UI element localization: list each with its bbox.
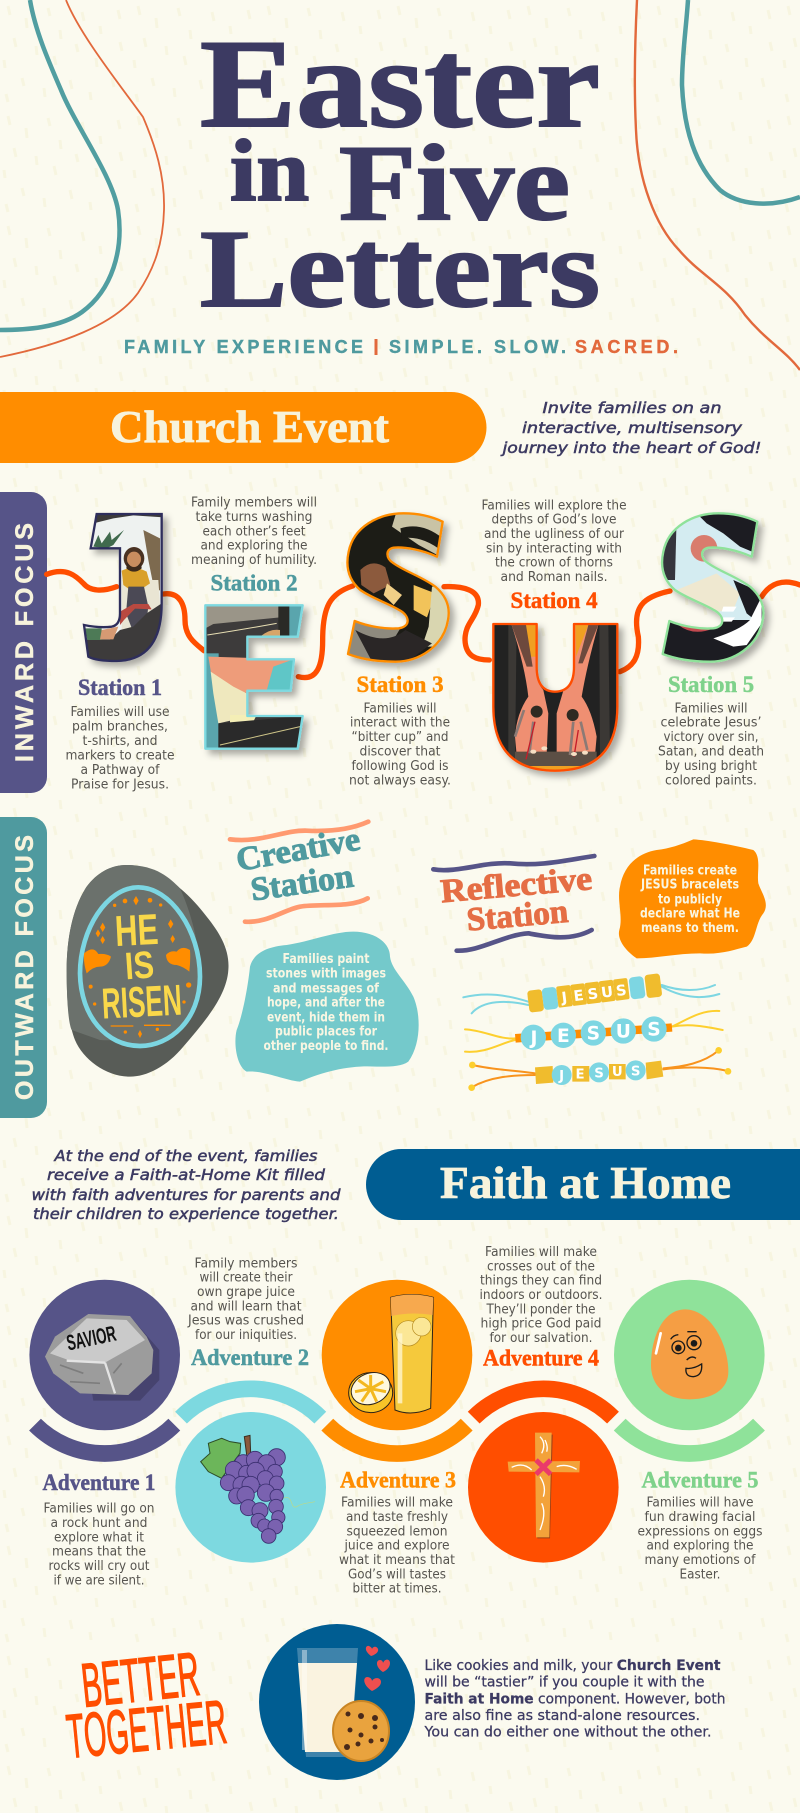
JESUS letters and connectors — [47, 510, 800, 773]
icon: painted stone, he is risen: IS — [123, 943, 155, 988]
icon: jesus bracelets: S — [615, 982, 628, 1000]
icon: jesus bracelets: S — [631, 1064, 640, 1079]
station 3: Station 3 — [356, 672, 444, 697]
station 2: Family members will — [191, 496, 317, 511]
text: better together description: are also fine as stand-alone resources. — [424, 1708, 700, 1724]
adventure 3: juice and explore — [344, 1539, 450, 1554]
station 5: by using bright — [665, 759, 757, 774]
icon: jesus bracelets: E — [573, 987, 585, 1005]
adventure 1: explore what it — [54, 1530, 144, 1545]
banner: Church Event — [0, 392, 486, 463]
station 2: Station 2 — [210, 571, 298, 596]
station 1: Families will use — [70, 705, 170, 720]
text: faith at home intro: their children to experience together. — [33, 1205, 339, 1223]
callout: creative station description: stones with images — [266, 967, 386, 982]
station 3: discover that — [360, 744, 440, 759]
station 3: “bitter cup” and — [352, 730, 448, 745]
icon: jesus bracelets: J — [560, 989, 568, 1007]
intro text: journey into the heart of God! — [500, 439, 762, 457]
icon: jesus bracelets: U — [600, 983, 614, 1002]
callout: reflective station description: Families create — [643, 863, 737, 878]
title: Five — [339, 124, 570, 243]
adventure 2: Adventure 2 — [191, 1345, 309, 1370]
icon: jesus bracelets: S — [587, 1024, 600, 1045]
text: better together description: Like cookies and milk, your Church Event — [424, 1658, 721, 1674]
adventure 3: bitter at times. — [352, 1582, 442, 1597]
adventure 4: for our salvation. — [490, 1331, 592, 1346]
station 1: Station 1 — [78, 675, 162, 700]
callout: creative station description: and messages of — [273, 981, 379, 996]
station 5 — [658, 672, 764, 788]
icon: jesus bracelets: J — [558, 1069, 564, 1084]
station 3: interact with the — [350, 716, 450, 731]
station 1: palm branches, — [72, 720, 168, 735]
icon: lemon juice glass — [346, 1294, 433, 1413]
adventure 5: Families will have — [646, 1496, 754, 1511]
callout: creative station description — [235, 932, 419, 1082]
adventure 5: and exploring the — [646, 1539, 754, 1554]
heading: reflective station: Station — [465, 893, 570, 939]
decorative curves: top corners — [0, 0, 800, 370]
intro text — [500, 399, 762, 457]
station 2: meaning of humility. — [191, 553, 317, 568]
station 5: Station 5 — [668, 672, 754, 697]
station 4: sin by interacting with — [486, 541, 622, 556]
station 3: Families will — [364, 701, 436, 716]
station 2 — [191, 496, 317, 596]
adventure 2 — [187, 1256, 309, 1370]
adventure 3: Adventure 3 — [340, 1468, 456, 1493]
letter S, station 3 — [342, 510, 452, 663]
icon: jesus bracelets: E — [557, 1026, 570, 1047]
adventure 3: squeezed lemon — [346, 1524, 448, 1539]
heading: reflective station: Reflective — [439, 860, 593, 910]
heading: better together — [64, 1640, 230, 1772]
station 5: Families will — [674, 701, 748, 716]
callout: creative station description: hope, and after the — [267, 996, 385, 1011]
heading: creative station — [230, 821, 368, 922]
text: better together description: will be “tastier” if you couple it with the — [424, 1675, 704, 1691]
subtitle: FAMILY EXPERIENCE — [124, 337, 363, 357]
title: Letters — [200, 208, 600, 331]
adventure 2: for our iniquities. — [195, 1328, 297, 1343]
adventure 1: means that the — [52, 1545, 146, 1560]
station 4 — [482, 498, 626, 613]
callout: creative station description: event, hide them in — [267, 1010, 385, 1025]
adventure 2: will create their — [200, 1271, 293, 1286]
icon: jesus bracelets — [463, 973, 731, 1091]
intro text: interactive, multisensory — [522, 419, 743, 437]
adventure 1: rocks will cry out — [48, 1559, 150, 1574]
callout: creative station description: public places for — [275, 1025, 377, 1040]
icon: painted stone, he is risen: RISEN — [101, 977, 183, 1029]
icon: egg face — [651, 1309, 728, 1399]
station 2: each other’s feet — [202, 524, 306, 539]
adventure 2: own grape juice — [197, 1285, 295, 1300]
banner: Faith at Home: Faith at Home — [440, 1157, 731, 1208]
banner: Faith at Home — [366, 1149, 800, 1220]
icon: painted stone, he is risen — [67, 865, 229, 1077]
intro text: Invite families on an — [542, 399, 722, 417]
station 1: a Pathway of — [80, 763, 160, 778]
callout: creative station description: other people to find. — [264, 1039, 388, 1054]
station 2: take turns washing — [196, 510, 312, 525]
station 4: Families will explore the — [482, 498, 626, 513]
station 5: Satan, and death — [658, 744, 764, 759]
callout: creative station description: Families paint — [282, 952, 370, 967]
text: faith at home intro: with faith adventures for parents and — [32, 1186, 341, 1204]
icon: jesus bracelets: S — [587, 985, 599, 1003]
station 1: Praise for Jesus. — [71, 777, 169, 792]
adventure 3 — [339, 1468, 456, 1597]
adventure 4: Adventure 4 — [483, 1346, 599, 1371]
adventure 4: Families will make — [485, 1245, 597, 1260]
heading: better together: BETTER — [78, 1640, 203, 1721]
icon: jesus bracelets: S — [594, 1066, 604, 1081]
adventure 1: Adventure 1 — [42, 1470, 156, 1495]
adventure 4: things they can find — [480, 1274, 602, 1289]
station 4: the crown of thorns — [495, 556, 613, 571]
adventure 4: They’ll ponder the — [486, 1302, 596, 1317]
panel: inward focus tab — [0, 492, 47, 793]
subtitle: SACRED. — [575, 337, 678, 357]
adventure 3: what it means that — [339, 1553, 455, 1568]
adventure 5: expressions on eggs — [638, 1524, 763, 1539]
adventure circles and arcs — [29, 1280, 765, 1563]
icon: jesus bracelets: S — [647, 1020, 661, 1041]
adventure 1 — [42, 1470, 156, 1588]
subtitle: SIMPLE. SLOW. — [389, 337, 566, 357]
adventure 3: Families will make — [341, 1496, 453, 1511]
panel: inward focus tab: INWARD FOCUS — [11, 523, 39, 762]
adventure 3: God’s will tastes — [348, 1567, 446, 1582]
station 4: Station 4 — [510, 588, 598, 613]
icon: grapes — [201, 1435, 315, 1543]
panel: outward focus tab: OUTWARD FOCUS — [11, 835, 39, 1100]
station 1: markers to create — [66, 748, 174, 763]
station 3 — [349, 672, 451, 788]
adventure 5: Easter. — [680, 1567, 720, 1582]
letter J — [80, 513, 163, 663]
adventure 4: high price God paid — [480, 1317, 602, 1332]
adventure 2: Family members — [194, 1256, 298, 1271]
text: faith at home intro: At the end of the event, families — [53, 1147, 318, 1165]
title: Easter — [200, 15, 600, 154]
title — [200, 15, 600, 331]
station 4: and the ugliness of our — [484, 527, 625, 542]
icon: milk and cookie — [259, 1624, 415, 1780]
connector lines — [47, 572, 800, 678]
station 1: t-shirts, and — [82, 734, 158, 749]
adventure 1: if we are silent. — [54, 1573, 144, 1588]
adventure 5: Adventure 5 — [642, 1468, 758, 1493]
station 4: and Roman nails. — [500, 570, 608, 585]
letter E — [203, 603, 303, 750]
icon: jesus bracelets: U — [612, 1065, 623, 1080]
station 3: following God is — [352, 759, 449, 774]
icon: wooden cross — [508, 1433, 580, 1538]
adventure 5: fun drawing facial — [644, 1510, 756, 1525]
station 5: victory over sin, — [664, 730, 758, 745]
subtitle — [124, 337, 678, 357]
adventure 4: indoors or outdoors. — [480, 1288, 602, 1303]
adventure 5: many emotions of — [644, 1553, 756, 1568]
icon: jesus bracelets: E — [575, 1068, 585, 1083]
adventure 5 — [638, 1468, 763, 1582]
callout: reflective station description: means to them. — [641, 921, 739, 936]
text: faith at home intro — [32, 1147, 341, 1223]
panel: outward focus tab — [0, 817, 47, 1118]
adventure 1: a rock hunt and — [50, 1516, 148, 1531]
station 5: celebrate Jesus’ — [660, 716, 762, 731]
station 2: and exploring the — [200, 539, 308, 554]
text: TOGETHER — [64, 1688, 230, 1772]
callout: reflective station description: JESUS bracelets — [640, 878, 739, 893]
station 4: depths of God’s love — [492, 513, 616, 528]
callout: reflective station description — [619, 839, 766, 958]
adventure 2: Jesus was crushed — [187, 1314, 304, 1329]
heading: creative station: Creative — [233, 821, 363, 879]
heading: reflective station — [433, 856, 594, 951]
station 3: not always easy. — [349, 773, 451, 788]
station 1 — [66, 675, 174, 792]
callout: reflective station description: to publicly — [658, 892, 722, 907]
icon: savior rock: SAVIOR — [64, 1321, 118, 1356]
text: better together description — [423, 1658, 726, 1741]
adventure 1: Families will go on — [44, 1502, 154, 1517]
text: faith at home intro: receive a Faith-at-Home Kit filled — [47, 1166, 326, 1184]
title: in — [230, 123, 309, 220]
station 5: colored paints. — [665, 773, 757, 788]
letter U — [492, 623, 620, 773]
icon: savior rock — [45, 1314, 159, 1401]
banner: Church Event: Church Event — [110, 401, 390, 452]
text: better together description: You can do either one without the other. — [423, 1725, 712, 1741]
adventure 4: crosses out of the — [487, 1259, 595, 1274]
adventure 2: and will learn that — [190, 1299, 302, 1314]
callout: reflective station description: declare what He — [640, 907, 740, 922]
adventure 4 — [480, 1245, 602, 1371]
text: better together description: Faith at Home component. However, both — [424, 1691, 726, 1707]
adventure 3: and taste freshly — [346, 1510, 448, 1525]
icon: jesus bracelets: J — [529, 1028, 537, 1049]
icon: jesus bracelets: U — [616, 1022, 631, 1043]
letter S, station 5 — [657, 510, 767, 667]
heading: creative station: Station — [248, 858, 356, 909]
icon: painted stone, he is risen: HE — [114, 906, 160, 956]
